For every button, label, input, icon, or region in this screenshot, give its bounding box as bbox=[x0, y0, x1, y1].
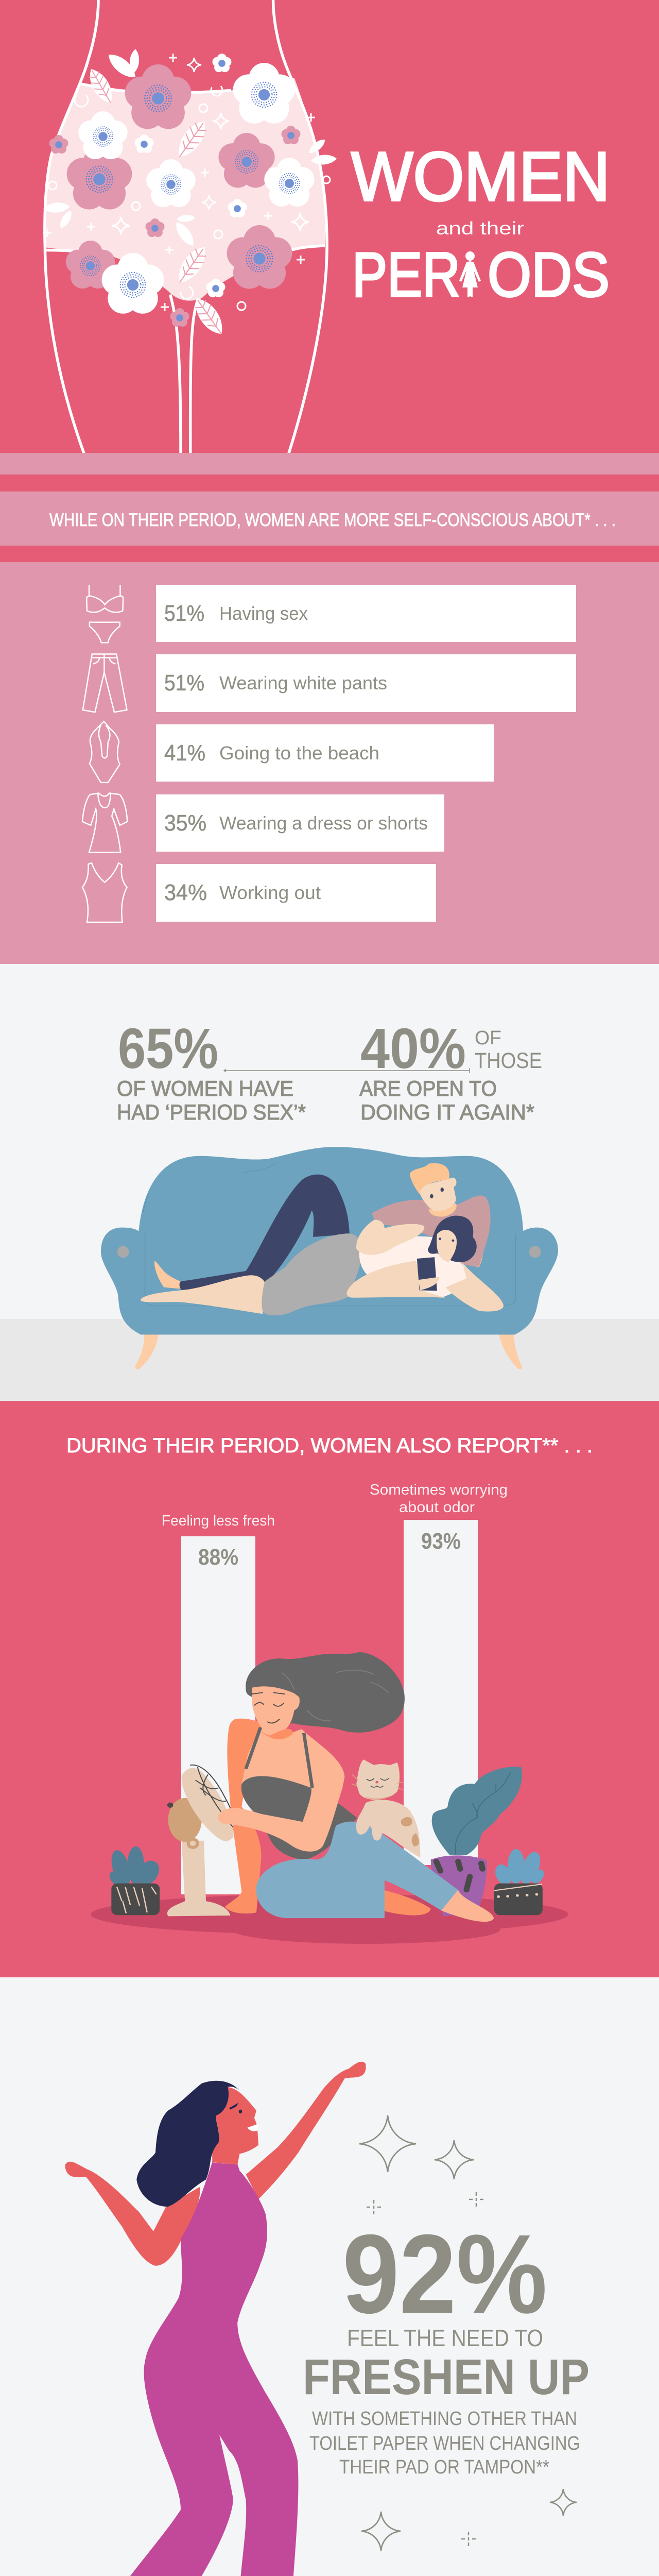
stat: 65 percent: OF WOMEN HAVE bbox=[117, 1076, 293, 1100]
stat: 92 percent freshen up: 92% bbox=[342, 2212, 547, 2337]
stat: 92 percent freshen up: FEEL THE NEED TO bbox=[347, 2325, 543, 2351]
icon: bikini bbox=[86, 585, 123, 642]
banner stripes bbox=[0, 453, 659, 562]
stat: 40 percent: THOSE bbox=[475, 1048, 542, 1073]
heading: women also report: DURING THEIR PERIOD, WOMEN ALSO REPORT** . . . bbox=[66, 1434, 593, 1457]
bar: wearing white pants: Wearing white pants bbox=[219, 672, 387, 693]
bar: worrying about odor: Sometimes worrying bbox=[370, 1482, 508, 1498]
woman with flowing hair bbox=[218, 1652, 494, 1922]
cat bbox=[352, 1759, 420, 1858]
bar: wearing white pants: 51% bbox=[164, 670, 204, 696]
man bbox=[372, 1163, 491, 1267]
bar: working out bbox=[156, 864, 436, 922]
bar: going to the beach: Going to the beach bbox=[219, 742, 379, 764]
stat: 40 percent: ARE OPEN TO bbox=[359, 1076, 497, 1100]
icon: dress bbox=[82, 793, 127, 852]
bar: worrying about odor bbox=[370, 1482, 508, 1865]
stat: 92 percent freshen up: TOILET PAPER WHEN CHANGING bbox=[309, 2433, 580, 2454]
title bbox=[351, 138, 610, 310]
stat: 65 percent: 65% bbox=[118, 1017, 218, 1080]
plant: right pot bbox=[492, 1849, 547, 1915]
panel: period sex bbox=[0, 964, 659, 1401]
bar: feeling less fresh: Feeling less fresh bbox=[162, 1513, 275, 1529]
floral decorations bbox=[43, 48, 337, 339]
plant: large purple pot bbox=[431, 1767, 522, 1916]
stat: 40 percent: DOING IT AGAIN* bbox=[360, 1100, 534, 1124]
stat: 92 percent freshen up: WITH SOMETHING OTHER THAN bbox=[312, 2408, 577, 2430]
woman bbox=[141, 1175, 504, 1315]
icon: tank top bbox=[82, 863, 127, 922]
bar: feeling less fresh: 88% bbox=[198, 1545, 238, 1570]
arms bbox=[65, 2062, 366, 2266]
bar: working out: 34% bbox=[164, 880, 207, 905]
leaves bbox=[43, 48, 337, 339]
bar: working out: Working out bbox=[219, 882, 321, 903]
bar: going to the beach bbox=[156, 724, 494, 782]
sparkles, crosses and rings bbox=[43, 54, 330, 311]
head and hair bbox=[136, 2081, 258, 2207]
bar: dress or shorts: 35% bbox=[164, 810, 206, 836]
bar: wearing white pants bbox=[156, 654, 576, 712]
icon: woman figure bbox=[459, 251, 481, 297]
sofa bbox=[101, 1147, 558, 1369]
title: WOMEN bbox=[351, 138, 610, 215]
illustration: woman with fan bbox=[91, 1652, 568, 1944]
fan bbox=[167, 1765, 237, 1916]
stat: 92 percent freshen up bbox=[303, 2212, 589, 2478]
floor shadow bbox=[91, 1894, 568, 1944]
illustration: couple on sofa bbox=[101, 1147, 558, 1369]
stat: 40 percent: 40% bbox=[360, 1017, 466, 1080]
title: I bbox=[468, 240, 472, 310]
body outline bbox=[45, 0, 327, 453]
icons: clothing bbox=[82, 585, 127, 922]
panel: freshen up bbox=[0, 1977, 659, 2576]
icon: swimsuit bbox=[90, 721, 120, 783]
stat: 92 percent freshen up: FRESHEN UP bbox=[303, 2349, 589, 2405]
title: ODS bbox=[488, 240, 610, 310]
bar: having sex: 51% bbox=[164, 601, 204, 626]
icon: pants bbox=[83, 654, 127, 712]
bar: having sex bbox=[156, 585, 576, 642]
bar: worrying about odor: about odor bbox=[399, 1499, 475, 1516]
panel: self-conscious bars bbox=[0, 562, 659, 964]
stat: 92 percent freshen up: THEIR PAD OR TAMPON** bbox=[339, 2456, 549, 2478]
title: and their bbox=[436, 218, 524, 239]
illustration: dancing woman bbox=[65, 2062, 366, 2576]
panel: during their period bbox=[0, 1401, 659, 1977]
bar: dress or shorts bbox=[156, 794, 444, 852]
stat: 40 percent: OF bbox=[475, 1027, 501, 1049]
stat: 65 percent bbox=[117, 1017, 306, 1124]
stat: 40 percent bbox=[359, 1017, 542, 1124]
panties fill bbox=[45, 78, 326, 301]
connector line bbox=[224, 1068, 470, 1073]
plant: left pot bbox=[107, 1846, 164, 1915]
title: PER bbox=[352, 240, 460, 310]
panel: hero bbox=[0, 0, 659, 453]
bar: worrying about odor: 93% bbox=[421, 1529, 461, 1554]
bar: going to the beach: 41% bbox=[164, 740, 205, 766]
bar: feeling less fresh bbox=[162, 1513, 275, 1894]
white flowers bbox=[78, 54, 315, 314]
bar: dress or shorts: Wearing a dress or shorts bbox=[219, 812, 428, 834]
pink flowers bbox=[49, 64, 301, 327]
sparkles bbox=[359, 2115, 577, 2551]
jumpsuit bbox=[126, 2162, 298, 2576]
stat: 65 percent: HAD ‘PERIOD SEX’* bbox=[117, 1100, 306, 1124]
bar: having sex: Having sex bbox=[219, 603, 308, 624]
